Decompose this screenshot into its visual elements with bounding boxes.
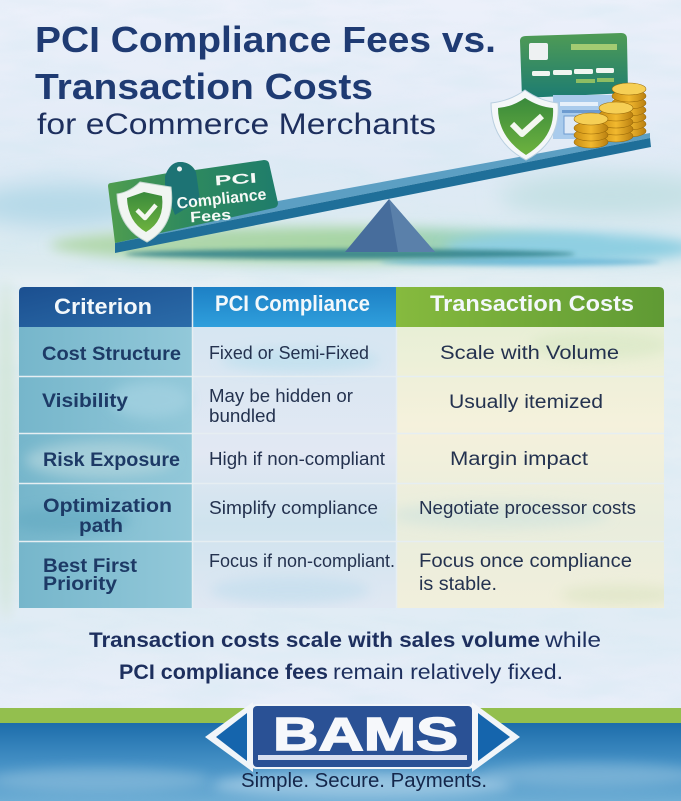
fulcrum	[345, 199, 435, 252]
tag: PCI Compliance Fees: PCI	[214, 170, 257, 188]
PCI compliance column: Simplify compliance	[209, 498, 378, 518]
summary statement: remain relatively fixed.	[333, 661, 563, 684]
logo plate: BAMS	[273, 708, 458, 760]
transaction costs column: Usually itemized	[449, 392, 603, 413]
header row: Criterion	[54, 294, 152, 319]
card	[520, 33, 628, 98]
left coin stack	[574, 113, 608, 148]
BAMS logo	[205, 702, 520, 792]
comparison table	[10, 287, 680, 608]
header row: PCI Compliance	[215, 291, 370, 316]
payment terminal	[553, 95, 613, 139]
PCI compliance column: May be hidden or	[209, 386, 353, 406]
summary statement: while	[544, 629, 601, 652]
transaction costs column: Scale with Volume	[440, 343, 619, 364]
PCI compliance column: bundled	[209, 406, 276, 426]
tag: PCI Compliance Fees: Fees	[190, 207, 232, 226]
right coin stack	[612, 83, 646, 137]
title: Transaction Costs	[35, 66, 373, 107]
title: PCI Compliance Fees vs.	[35, 19, 496, 60]
PCI compliance column: Focus if non-compliant.	[209, 551, 395, 571]
table body cells	[10, 287, 680, 608]
summary statement	[89, 629, 601, 684]
tag: PCI Compliance Fees	[108, 160, 278, 243]
beam	[115, 133, 651, 253]
title	[35, 19, 496, 141]
middle coin stack	[599, 102, 633, 142]
transaction costs column: Focus once compliance	[419, 551, 632, 572]
summary statement: Transaction costs scale with sales volume	[89, 629, 540, 652]
transaction costs column: Margin impact	[450, 449, 589, 470]
tagline: Simple. Secure. Payments.	[241, 770, 487, 792]
tag: PCI Compliance Fees: Compliance	[176, 186, 267, 213]
logo plate	[251, 704, 474, 769]
PCI compliance column: High if non-compliant	[209, 449, 385, 469]
transaction costs column: Negotiate processor costs	[419, 498, 636, 518]
row labels	[42, 344, 181, 595]
shield with check	[491, 90, 558, 160]
row labels: Risk Exposure	[43, 450, 180, 471]
PCI compliance column	[209, 343, 395, 571]
transaction costs column	[419, 343, 636, 595]
transaction costs column: is stable.	[419, 574, 497, 595]
PCI compliance column: Fixed or Semi-Fixed	[209, 343, 369, 363]
row labels: Cost Structure	[42, 344, 181, 365]
row labels: Best First	[43, 556, 138, 577]
footer band	[0, 708, 681, 801]
summary statement: PCI compliance fees	[119, 661, 328, 684]
row labels: Visibility	[42, 391, 128, 412]
row labels: Optimization	[43, 496, 172, 517]
illustration: balance scale	[108, 33, 651, 253]
row labels: Priority	[43, 574, 117, 595]
header row	[19, 287, 664, 327]
coins	[574, 83, 646, 148]
logo arrows	[205, 702, 520, 772]
row labels: path	[79, 516, 123, 537]
tag shield with check	[117, 182, 172, 242]
header row: Transaction Costs	[430, 291, 634, 316]
title: for eCommerce Merchants	[37, 108, 436, 141]
